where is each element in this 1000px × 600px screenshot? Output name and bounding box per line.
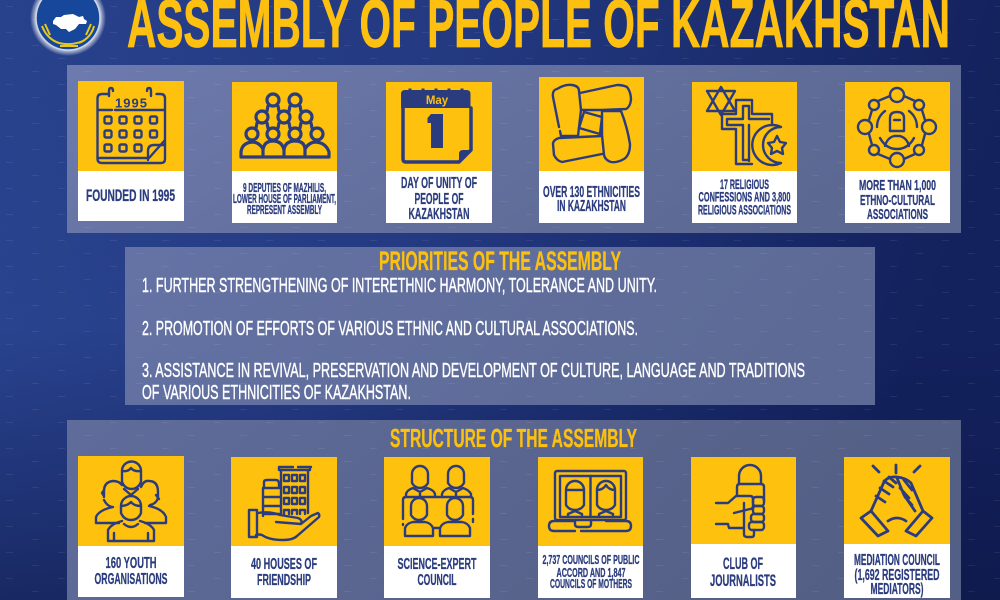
caption: councils: 2,737 COUNCILS OF PUBLIC — [542, 552, 640, 567]
panel: priorities — [125, 246, 875, 405]
heading: priorities: PRIORITIES OF THE ASSEMBLY — [379, 246, 621, 276]
caption: deputies — [233, 181, 336, 217]
card: councils of public accord and mothers — [538, 457, 643, 598]
caption: ethno-cultural — [859, 177, 936, 223]
caption: religions: CONFESSIONS AND 3,800 — [698, 188, 791, 204]
icon: laptop with two faces — [549, 471, 631, 531]
card: club of journalists — [691, 457, 796, 598]
caption: councils: ACCORD AND 1,847 — [556, 565, 626, 580]
text block: priority list — [142, 274, 805, 404]
caption: ethno-cultural: MORE THAN 1,000 — [859, 177, 936, 194]
caption: houses: FRIENDSHIP — [257, 572, 311, 589]
caption: youth: 160 YOUTH — [106, 555, 156, 572]
icon: group of people — [96, 462, 166, 541]
text block: priority list: 2. PROMOTION OF EFFORTS OF VARIOUS ETHNIC AND CULTURAL ASSOCIATIONS. — [142, 317, 638, 340]
caption: councils: COUNCILS OF MOTHERS — [550, 576, 632, 591]
caption: mediation: (1,692 REGISTERED — [854, 567, 940, 584]
caption: deputies: LOWER HOUSE OF PARLIAMENT, — [233, 192, 336, 206]
caption: youth — [94, 555, 168, 588]
icon: crowd of people — [241, 94, 329, 157]
caption: day of unity: KAZAKHSTAN — [408, 206, 470, 223]
icon: calendar 1995 — [98, 88, 165, 163]
caption: council: SCIENCE-EXPERT — [398, 556, 477, 573]
caption: ethnicities: IN KAZAKHSTAN — [557, 198, 626, 215]
icon: fist holding microphone — [716, 465, 764, 537]
caption: religions — [698, 176, 791, 218]
caption: council: COUNCIL — [418, 572, 457, 589]
card: ethnicities — [539, 77, 644, 223]
card: deputies — [232, 82, 337, 223]
panel: key facts — [67, 65, 961, 233]
icon: clasped hands — [861, 465, 932, 536]
card: science-expert council — [384, 457, 490, 598]
caption: youth: ORGANISATIONS — [94, 571, 168, 588]
caption: ethnicities — [543, 184, 640, 215]
icon: hand holding building — [249, 467, 319, 540]
caption: deputies: 9 DEPUTIES OF MAZHILIS, — [243, 181, 326, 195]
icon: star, cross and crescent — [707, 87, 786, 165]
panel: structure — [67, 420, 961, 600]
text block: priority list: 1. FURTHER STRENGTHENING OF INTERETHNIC HARMONY, TOLERANCE AND UNITY. — [142, 274, 657, 297]
heading: structure: STRUCTURE OF THE ASSEMBLY — [390, 423, 637, 453]
caption: councils — [542, 552, 640, 591]
caption: ethno-cultural: ETHNO-CULTURAL — [860, 192, 935, 209]
card: ethno-cultural associations — [845, 82, 950, 223]
caption: religions: RELIGIOUS ASSOCIATIONS — [698, 202, 791, 218]
caption: journalists — [710, 554, 776, 590]
caption: ethnicities: OVER 130 ETHNICITIES — [543, 184, 640, 201]
card: houses of friendship — [231, 457, 337, 598]
card: youth organisations — [78, 456, 184, 597]
card: mediation council — [844, 457, 950, 598]
card: founded in 1995 — [78, 81, 184, 221]
caption: ethno-cultural: ASSOCIATIONS — [867, 206, 928, 223]
caption: journalists: CLUB OF — [723, 554, 763, 573]
caption: council — [398, 556, 477, 589]
text block: priority list: OF VARIOUS ETHNICITIES OF KAZAKHSTAN. — [142, 381, 411, 404]
logo: Assembly emblem — [30, 0, 106, 56]
caption: day of unity: PEOPLE OF — [414, 191, 464, 208]
icon: interlocked hands — [553, 85, 631, 162]
caption: houses: 40 HOUSES OF — [251, 556, 317, 573]
caption: founded: FOUNDED IN 1995 — [86, 187, 175, 205]
caption: mediation: MEDIATORS) — [870, 581, 924, 598]
icon: council around a table — [403, 466, 473, 536]
icon label: 1995: 1995 — [115, 96, 147, 110]
caption: day of unity: DAY OF UNITY OF — [401, 175, 477, 192]
card: religions — [692, 82, 797, 223]
caption: religions: 17 RELIGIOUS — [720, 176, 769, 192]
caption: journalists: JOURNALISTS — [710, 571, 776, 590]
caption: houses — [251, 556, 317, 589]
caption: mediation — [854, 552, 940, 598]
card: day of unity — [386, 82, 492, 223]
icon: May 1 calendar — [401, 88, 471, 162]
icon: May 1 calendar: May — [426, 95, 449, 107]
icon: network around a person — [858, 88, 936, 167]
caption: deputies: REPRESENT ASSEMBLY — [247, 203, 322, 217]
caption: day of unity — [401, 175, 477, 223]
